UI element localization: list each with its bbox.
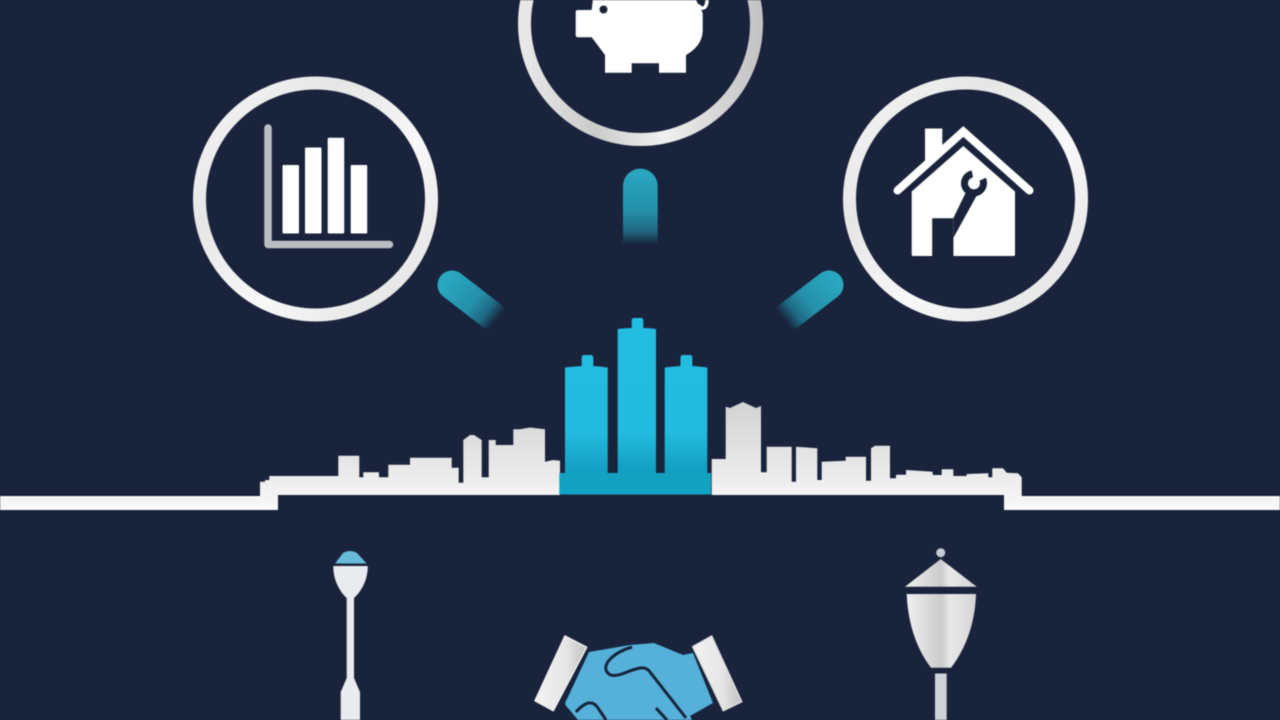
panel: bar chart circle [200, 83, 432, 315]
door [932, 218, 953, 256]
ring: left circle [200, 83, 432, 315]
connector: left pill [452, 285, 491, 315]
street lamp: left [333, 551, 368, 720]
finger lines [576, 703, 667, 720]
ring: right circle [850, 83, 1082, 315]
chart bars [282, 138, 367, 234]
lamp finial [936, 548, 945, 557]
lamp roof [905, 559, 977, 587]
skyline: white buildings and ground line [0, 402, 1280, 510]
icon: bar chart [268, 128, 390, 244]
house roof [898, 132, 1030, 190]
hand outline [606, 647, 686, 718]
piggy tail [698, 0, 707, 8]
wrench handle [953, 190, 977, 238]
panel: piggy bank circle [524, 0, 756, 140]
wrench head [961, 171, 987, 196]
connector: right pill [790, 285, 829, 315]
clasped hands [565, 643, 713, 720]
house chimney [925, 128, 942, 168]
piggy eye [600, 6, 608, 14]
lamp bowl and post [333, 566, 368, 720]
panel: house repair circle [850, 83, 1082, 315]
connector: middle pill [623, 169, 658, 245]
lamp bowl [907, 594, 976, 668]
icon: handshake [535, 636, 742, 720]
house body [912, 146, 1015, 256]
icon: house with wrench [898, 128, 1030, 256]
lamp post [935, 674, 947, 720]
skyline: blue central towers [559, 318, 711, 494]
icon: piggy bank [576, 0, 707, 73]
left cuff [535, 636, 587, 711]
street lamp: right [905, 548, 977, 720]
lamp cap [335, 551, 367, 564]
right cuff [693, 636, 742, 711]
ring: top circle [524, 0, 756, 140]
chart axes [268, 128, 390, 244]
